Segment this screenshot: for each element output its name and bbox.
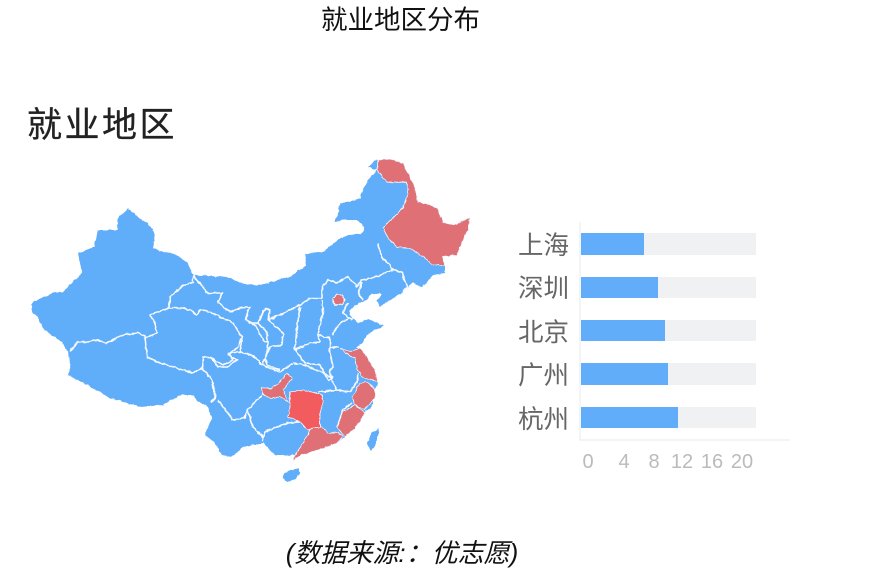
bar: Beijing: 北京 — [518, 319, 569, 347]
bar: Guangzhou — [518, 362, 756, 390]
map of China — [31, 159, 470, 482]
chart: axis tick labels: 4 — [618, 451, 630, 473]
map: Hunan highlighted — [288, 390, 323, 430]
map: province borders — [70, 243, 407, 441]
bar: Shenzhen — [518, 275, 756, 303]
bar: Shenzhen: 深圳 — [518, 275, 569, 303]
map: Taiwan island — [367, 429, 379, 451]
chart: axis tick labels: 20 — [731, 451, 753, 473]
chart: axis tick labels — [582, 451, 753, 473]
map: Beijing highlighted — [333, 294, 345, 305]
map: Heilongjiang highlighted — [377, 159, 470, 265]
map: Guangdong highlighted — [292, 427, 343, 466]
map: Zhejiang highlighted — [352, 382, 375, 410]
bar: Beijing — [518, 319, 756, 347]
bar: Guangzhou: 广州 — [518, 362, 569, 390]
chart: axes — [580, 222, 790, 440]
chart: axis tick labels: 16 — [701, 451, 723, 473]
map: Hainan island — [283, 468, 300, 482]
bar chart — [518, 222, 790, 473]
source note: (数据来源:：优志愿) — [286, 538, 518, 568]
chart: axis tick labels: 8 — [648, 451, 660, 473]
map: country base — [31, 159, 470, 457]
chart: axis tick labels: 12 — [671, 451, 693, 473]
bar: Hangzhou: 杭州 — [518, 406, 569, 434]
chart: axis tick labels: 0 — [582, 451, 594, 473]
bar: Shanghai — [518, 232, 756, 260]
bar: Shanghai: 上海 — [518, 232, 569, 260]
map: Fujian highlighted — [337, 405, 365, 437]
map: Jiangsu highlighted — [340, 348, 378, 382]
title: 就业地区分布 — [321, 5, 480, 35]
heading: employment regions: 就业地区 — [27, 106, 177, 145]
bar: Hangzhou — [518, 406, 756, 434]
map: Chongqing highlighted — [262, 373, 292, 402]
